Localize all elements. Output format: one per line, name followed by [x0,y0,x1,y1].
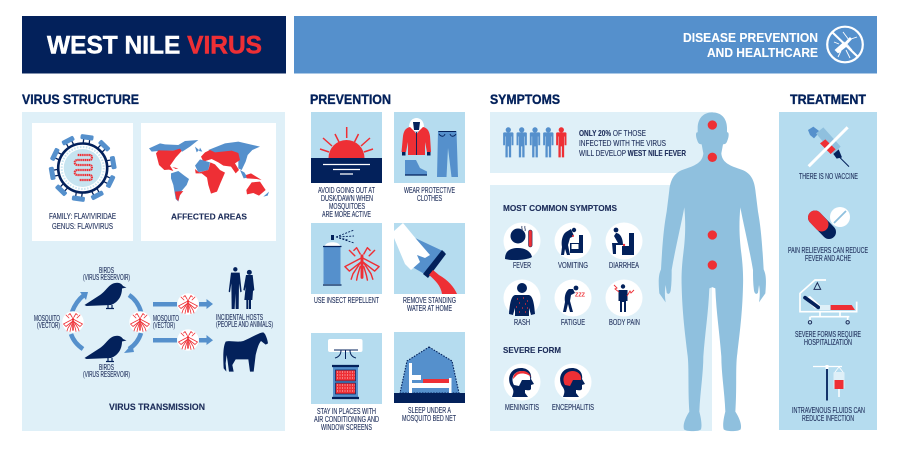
panel: insect repellent [311,223,382,305]
symptom: encephalitis [552,364,594,412]
icon: intravenous drip [813,365,844,400]
diagram: virus transmission [34,266,273,413]
header band: disease prevention and healthcare: AND HEALTHCARE [707,46,818,60]
icon: pills [815,207,850,232]
label: pain relievers: FEVER AND ACHE [805,254,851,263]
panel: mosquito bed net: SLEEP UNDER A [408,406,452,415]
icon: no mosquito [827,27,863,62]
symptom: rash [504,280,540,327]
transmission labels: BIRDS [99,363,114,372]
statistic text: ONLY 20% OF THOSE [579,128,646,138]
card: affected areas [141,123,276,241]
panel: 20 percent statistic [490,112,712,173]
title banner: WEST NILE VIRUS [47,32,262,60]
arrow: to animals [153,335,213,345]
title banner [22,16,286,74]
heading: symptoms: SYMPTOMS [490,92,560,107]
map: world affected areas [149,140,269,202]
label: hospitalization: HOSPITALIZATION [804,338,852,347]
header band: disease prevention and healthcare [294,16,877,74]
heading: virus structure: VIRUS STRUCTURE [22,92,139,107]
figure: human body with symptom points [659,112,766,431]
label: family and genus [49,212,116,231]
label: family and genus: FAMILY: FLAVIVIRIDAE [49,212,116,221]
card: virus family [32,123,133,241]
transmission labels: INCIDENTAL HOSTS [216,313,263,322]
panel: most common and severe symptoms: SEVERE FORM [503,345,561,355]
transmission labels: (VIRUS RESERVOIR) [83,370,130,379]
symptom: diarrhea: DIARRHEA [609,261,640,270]
panel: most common and severe symptoms [490,185,712,431]
symptom: diarrhea [606,222,642,270]
panel: mosquito bed net [394,332,465,423]
heading: prevention: PREVENTION [310,92,391,107]
transmission labels: (VIRUS RESERVOIR) [83,273,130,282]
panel: air conditioning and screens: AIR CONDITIONING AND [314,415,379,424]
panel: most common and severe symptoms: MOST COMMON SYMPTOMS [503,203,617,213]
transmission labels: MOSQUITO [153,314,179,323]
panel: air conditioning and screens: STAY IN PLACES WITH [317,407,376,416]
diagram: virus transmission: VIRUS TRANSMISSION [109,402,205,413]
icon: mosquito left [62,311,84,333]
icon: hospital bed [800,280,857,324]
panel: protective clothes: WEAR PROTECTIVE [404,186,455,195]
symptom: vomiting [554,222,592,270]
panel: protective clothes: CLOTHES [417,194,442,203]
icon: people [229,267,254,309]
panel: insect repellent: USE INSECT REPELLENT [314,296,379,305]
symptom: vomiting: VOMITING [558,261,588,270]
transmission labels: BIRDS [99,266,114,275]
panel: prevention dusk and dawn: MOSQUITOES [329,202,365,211]
panel: prevention dusk and dawn: DUSK/DAWN WHEN [321,194,373,203]
transmission labels: (PEOPLE AND ANIMALS) [216,320,273,329]
symptom: encephalitis: ENCEPHALITIS [552,403,594,412]
symptom: body pain [606,280,642,327]
label: intravenous fluids [792,406,865,423]
symptom: fatigue: ZZZ [575,292,585,298]
panel: standing water: WATER AT HOME [407,304,452,313]
symptom: fatigue [554,280,592,327]
icon: bird bottom [84,336,126,362]
panel: protective clothes [394,112,465,203]
symptom: fever: FEVER [513,261,531,270]
icon: crossed syringe [808,127,849,167]
label: hospitalization: SEVERE FORMS REQUIRE [795,330,861,339]
symptom: fever [504,222,540,270]
transmission labels: MOSQUITO [34,314,60,323]
symptom: rash: RASH [514,318,530,327]
icon: horse [223,332,268,372]
icon: five people [503,127,566,157]
label: hospitalization [795,330,861,347]
icon: mosquito to people [177,293,199,315]
statistic text [579,128,686,158]
symptom: meningitis [504,364,540,412]
symptom: meningitis: MENINGITIS [505,403,539,412]
panel: prevention dusk and dawn: AVOID GOING OUT AT [318,186,375,195]
card: affected areas: AFFECTED AREAS [171,212,247,222]
panel: air conditioning and screens: WINDOW SCREENS [321,423,372,432]
icon: virus particle [49,134,117,202]
symptom: fatigue: FATIGUE [561,318,585,327]
arrow: to people [153,299,213,309]
icon: mosquito right [129,311,151,333]
icon: bird top [84,283,126,308]
panel: mosquito bed net: MOSQUITO BED NET [402,414,456,423]
transmission labels [34,266,273,379]
icon: mosquito to animals [177,329,199,351]
statistic text: WILL DEVELOP WEST NILE FEVER [579,148,686,158]
symptom: body pain: BODY PAIN [609,318,640,327]
panel: air conditioning and screens [311,333,382,432]
label: pain relievers [788,246,868,263]
statistic text: INFECTED WITH THE VIRUS [579,138,666,148]
label: intravenous fluids: INTRAVENOUS FLUIDS CAN [792,406,865,415]
label: intravenous fluids: REDUCE INFECTION [802,414,854,423]
header band: disease prevention and healthcare: DISEASE PREVENTION [683,31,818,45]
panel: prevention dusk and dawn: ARE MORE ACTIVE [322,210,371,219]
panel: prevention dusk and dawn [311,112,382,219]
heading: treatment: TREATMENT [790,92,867,107]
cycle arrows [71,292,141,353]
panel: virus structure [22,112,285,431]
panel: treatment: THERE IS NO VACCINE [799,172,858,181]
panel: standing water [394,223,465,313]
transmission labels: (VECTOR) [153,321,175,330]
label: family and genus: GENUS: FLAVIVIRUS [52,222,113,231]
panel: standing water: REMOVE STANDING [403,296,456,305]
panel: treatment [779,112,877,430]
transmission labels: (VECTOR) [37,321,60,330]
